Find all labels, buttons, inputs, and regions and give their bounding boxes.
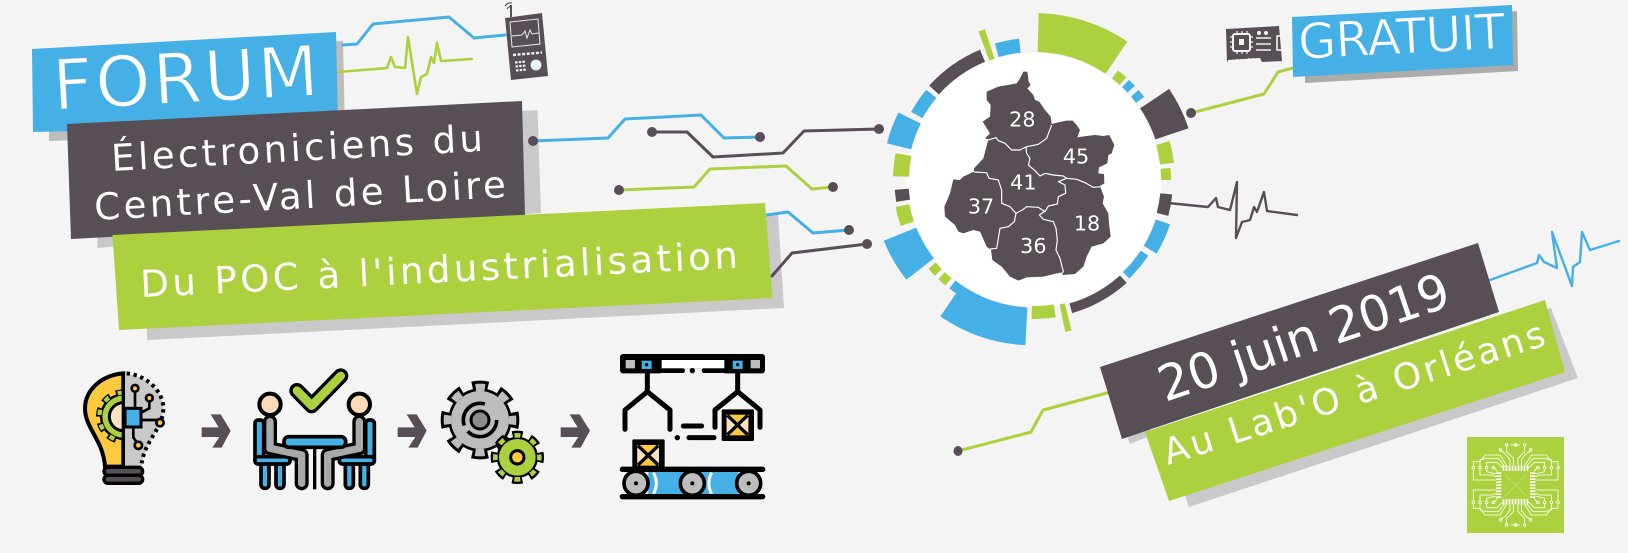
ECG trace: dark (1168, 182, 1297, 238)
arrow: step two to three (398, 414, 427, 448)
panel: audience heading (67, 101, 525, 239)
ring of segments around map (831, 0, 1237, 383)
map of Centre-Val de Loire (944, 72, 1114, 281)
panel: FORUM title: FORUM (50, 30, 321, 127)
panel: subtitle: Du POC à l'industrialisation (139, 234, 739, 306)
arrow: step one to two (202, 414, 231, 448)
icon: meeting table (255, 376, 374, 489)
map of Centre-Val de Loire: 41 (1010, 171, 1036, 195)
map of Centre-Val de Loire: 36 (1020, 234, 1046, 258)
map of Centre-Val de Loire: 28 (1009, 107, 1035, 131)
icon: production line (620, 354, 765, 497)
panel: GRATUIT badge: GRATUIT (1297, 3, 1507, 71)
panel: audience heading: Centre-Val de Loire (93, 163, 507, 229)
circuit traces (343, 17, 1293, 451)
panel: location: Au Lab'O à Orléans (1158, 314, 1550, 474)
icon: gears (447, 387, 540, 480)
panel: subtitle (112, 203, 772, 330)
map of Centre-Val de Loire: 45 (1063, 144, 1089, 168)
logo: green chip square (1467, 437, 1564, 533)
circuit end dots (528, 108, 1196, 456)
icon: circuit board (1226, 26, 1282, 63)
map of Centre-Val de Loire: 18 (1074, 212, 1100, 236)
ECG trace: green (338, 37, 472, 94)
arrow: step three to four (561, 414, 590, 448)
icon: idea bulb (85, 373, 164, 483)
map of Centre-Val de Loire: 37 (968, 194, 994, 218)
panel: date (1100, 243, 1499, 439)
ECG trace: blue (1490, 232, 1619, 286)
panel: date: 20 juin 2019 (1151, 262, 1457, 413)
panel: audience heading: Électroniciens du (110, 116, 484, 180)
icon: handheld device (505, 3, 548, 80)
